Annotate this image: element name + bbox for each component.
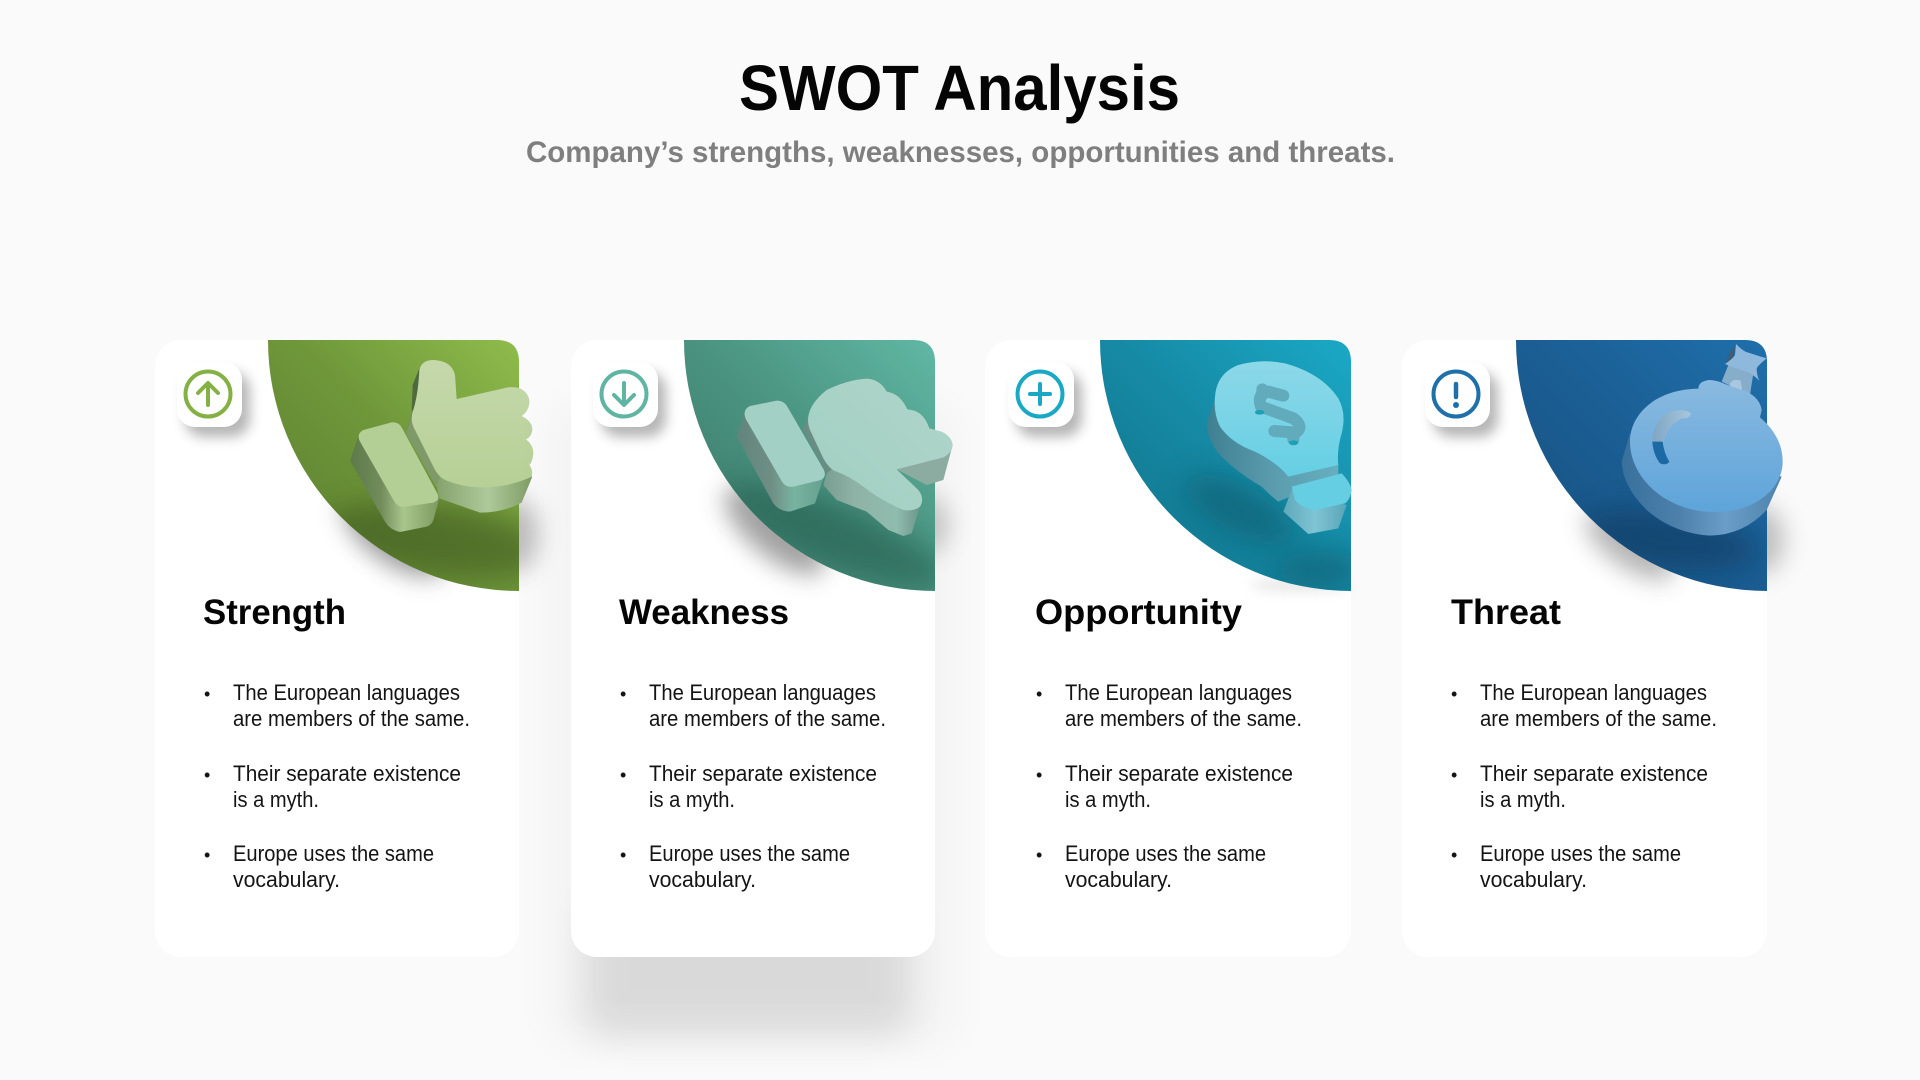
bullet list: weakness: • <box>620 845 626 865</box>
bullet list: threat: • <box>1451 684 1457 704</box>
heading: threat: Threat <box>1451 593 1561 632</box>
bullet list: threat: • <box>1451 765 1457 785</box>
bullet list: strength: Their separate existence <box>233 761 461 786</box>
bullet list: opportunity: • <box>1036 684 1042 704</box>
bullet list: threat: is a myth. <box>1480 787 1566 812</box>
bullet list: strength: • <box>204 845 210 865</box>
bullet list: opportunity: Europe uses the same <box>1065 841 1266 866</box>
bullet list: threat: Their separate existence <box>1480 761 1708 786</box>
bullet list: weakness <box>620 680 886 892</box>
bullet list: strength <box>204 680 470 892</box>
bullet list: weakness: Their separate existence <box>649 761 877 786</box>
bullet list: opportunity: The European languages <box>1065 680 1292 705</box>
icon tile: arrow down <box>593 362 666 437</box>
bullet list: threat: are members of the same. <box>1480 706 1717 731</box>
bullet list: threat: vocabulary. <box>1480 867 1587 892</box>
icon tile: plus <box>1008 362 1082 437</box>
bullet list: weakness: • <box>620 765 626 785</box>
heading: weakness: Weakness <box>619 593 789 632</box>
panel: threat <box>1428 340 1796 892</box>
icon: thumbs down <box>737 379 953 536</box>
bullet list: weakness: are members of the same. <box>649 706 886 731</box>
strength quarter shape <box>268 340 519 591</box>
icon tile: arrow up <box>177 362 250 437</box>
icon: bomb <box>1622 344 1783 536</box>
icon tile: exclamation <box>1425 362 1498 437</box>
subtitle: Company’s strengths, weaknesses, opportunities and threats. <box>526 136 1395 169</box>
heading: opportunity: Opportunity <box>1035 593 1243 632</box>
bullet list: opportunity: • <box>1036 845 1042 865</box>
bullet list: strength: are members of the same. <box>233 706 470 731</box>
bullet list: strength: Europe uses the same <box>233 841 434 866</box>
panel: weakness <box>545 340 960 1050</box>
opportunity quarter shape <box>1100 340 1351 591</box>
bullet list: weakness: Europe uses the same <box>649 841 850 866</box>
icon: thumbs up <box>350 360 533 532</box>
bullet list: strength: The European languages <box>233 680 460 705</box>
bullet list: opportunity: are members of the same. <box>1065 706 1302 731</box>
bullet list: opportunity: • <box>1036 765 1042 785</box>
bullet list: threat: The European languages <box>1480 680 1707 705</box>
bullet list: opportunity: vocabulary. <box>1065 867 1172 892</box>
bullet list: weakness: The European languages <box>649 680 876 705</box>
weakness card shadow <box>545 400 960 1050</box>
bullet list: strength: • <box>204 684 210 704</box>
bullet list: strength: vocabulary. <box>233 867 340 892</box>
bullet list: threat: • <box>1451 845 1457 865</box>
panel: strength <box>180 340 550 892</box>
bullet list: opportunity: Their separate existence <box>1065 761 1293 786</box>
bullet list: threat <box>1451 680 1717 892</box>
bullet list: threat: Europe uses the same <box>1480 841 1681 866</box>
panel: opportunity <box>1011 340 1352 892</box>
bullet list: strength: • <box>204 765 210 785</box>
icon: light bulb with dollar sign <box>1207 361 1352 534</box>
bullet list: opportunity <box>1036 680 1302 892</box>
bullet list: weakness: is a myth. <box>649 787 735 812</box>
threat quarter shape <box>1516 340 1767 591</box>
bullet list: opportunity: is a myth. <box>1065 787 1151 812</box>
heading: strength: Strength <box>203 593 346 632</box>
weakness quarter shape <box>684 340 935 591</box>
bullet list: strength: is a myth. <box>233 787 319 812</box>
title: SWOT Analysis <box>739 52 1180 124</box>
bullet list: weakness: vocabulary. <box>649 867 756 892</box>
bullet list: weakness: • <box>620 684 626 704</box>
